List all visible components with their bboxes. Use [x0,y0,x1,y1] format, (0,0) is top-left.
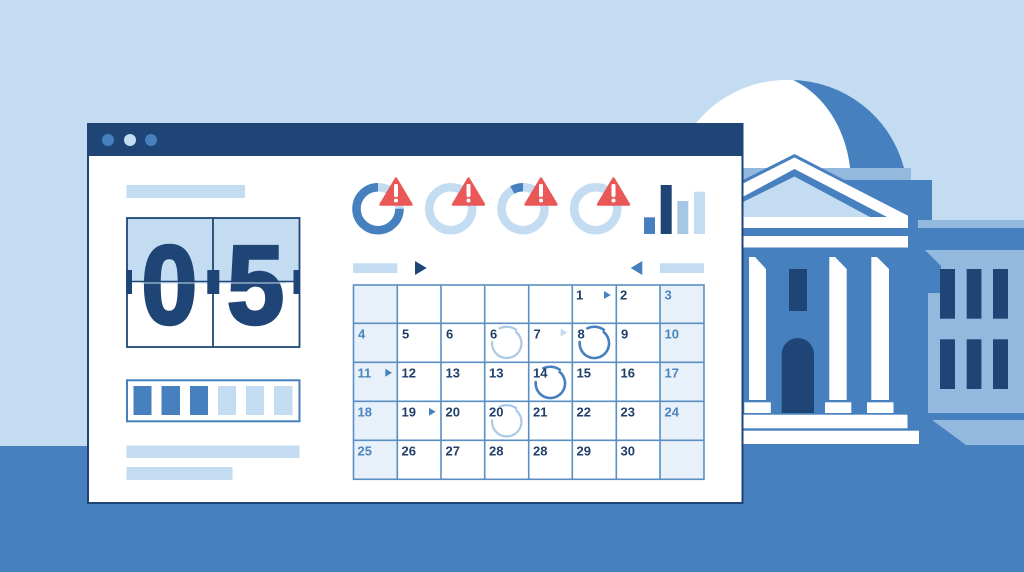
calendar dates: 6 [446,326,453,342]
main building body [743,180,1024,446]
gauge 2 [429,178,484,230]
calendar dates: 4 [358,326,366,342]
calendar dates: 17 [664,366,679,380]
calendar dates: 26 [402,444,416,458]
calendar dates: 25 [358,444,372,458]
building: institution with dome and columns [696,80,1024,446]
cell arrow markers [385,291,611,416]
calendar dates: 12 [402,366,416,380]
gauge 3 [502,178,556,230]
donut gauges with warning icons [356,178,629,230]
calendar dates: 13 [446,366,460,380]
calendar dates: 16 [620,366,635,380]
calendar dates: 9 [621,326,628,342]
calendar dates: 11 [358,366,371,380]
columns [744,257,894,413]
calendar dates: 28 [489,444,503,458]
calendar dates: 23 [620,404,635,420]
calendar dates: 30 [620,444,635,458]
calendar dates: 2 [620,288,627,302]
arched door [782,338,814,413]
dome [696,80,904,168]
calendar grid [354,285,704,480]
digit 5: 5 [227,222,284,347]
right wing [918,220,1024,445]
browser window panel [87,123,743,503]
calendar dates: 24 [664,404,680,420]
calendar dates: 29 [576,444,591,458]
gauge 4 [574,178,629,230]
calendar dates: 20 [489,404,503,420]
mini bar chart [644,185,705,234]
calendar dates: 27 [446,444,460,458]
progress rings on dates [492,327,609,436]
segmented progress bar [127,380,300,421]
central window [789,269,807,311]
placeholder text lines [126,446,300,480]
calendar dates: 15 [576,366,591,380]
placeholder heading bar [126,185,245,198]
steps [743,415,919,444]
calendar navigation [353,261,704,275]
calendar dates: 13 [489,366,503,380]
calendar dates: 8 [578,326,585,342]
window title bar [87,123,743,156]
calendar dates: 22 [576,404,591,420]
calendar dates: 14 [533,366,548,380]
calendar dates: 7 [534,326,541,342]
flip clock showing 05 [126,218,300,348]
calendar dates: 28 [533,444,547,458]
calendar dates [358,288,680,458]
drum band [743,168,911,180]
calendar dates: 5 [402,326,409,342]
calendar dates: 18 [358,404,372,420]
pediment [743,154,908,248]
calendar dates: 3 [664,288,672,302]
calendar dates: 19 [402,404,416,420]
calendar dates: 6 [490,326,497,342]
calendar dates: 10 [664,326,679,342]
calendar dates: 21 [533,404,547,420]
calendar dates: 1 [576,288,583,302]
gauge 1 [356,178,412,230]
calendar dates: 20 [446,404,460,420]
digit 0: 0 [142,223,197,348]
